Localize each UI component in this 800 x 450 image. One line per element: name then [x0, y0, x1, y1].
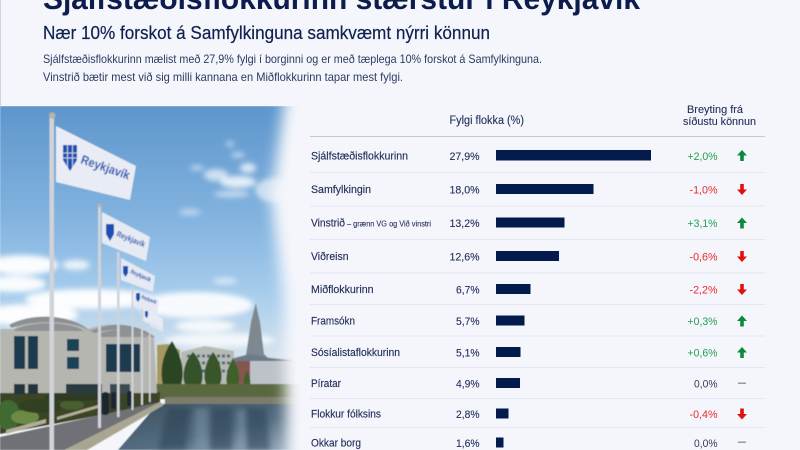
row: Framsókn: +0,3% — [688, 316, 718, 328]
sky — [0, 106, 294, 384]
row: Sósíalistaflokkurinn: 5,1% — [456, 348, 480, 360]
row: Framsókn — [311, 316, 747, 328]
row: Sósíalistaflokkurinn: Sósíalistaflokkurinn — [311, 347, 400, 359]
left page edge — [0, 0, 1, 106]
flag 1: Reykjavík — [79, 153, 132, 182]
ground, quay wall and garden — [0, 392, 164, 450]
row: Okkar borg: Okkar borg — [311, 438, 361, 450]
photo: Reykjavík flags by the pond — [0, 106, 297, 450]
water — [118, 404, 320, 450]
flag 5 — [142, 310, 164, 328]
row: Sósíalistaflokkurinn: +0,6% — [688, 348, 718, 360]
row: Flokkur fólksins — [311, 408, 747, 421]
row: Vinstrið: Vinstrið — [311, 218, 345, 230]
people on the promenade — [102, 391, 132, 415]
row: Píratar: 0,0% — [694, 378, 718, 390]
row: Framsókn: 5,7% — [456, 316, 480, 328]
flag poles — [49, 112, 151, 450]
row: Miðflokkurinn: Miðflokkurinn — [311, 284, 374, 296]
intro text — [43, 52, 542, 84]
row: Framsókn: Framsókn — [311, 316, 355, 328]
row: Vinstrið: 13,2% — [450, 218, 480, 230]
table header: support: Fylgi flokka (%) — [450, 115, 524, 127]
flag 6 — [150, 324, 164, 332]
clouds — [0, 141, 295, 347]
row: Okkar borg: 1,6% — [456, 438, 480, 450]
row: Flokkur fólksins: Flokkur fólksins — [311, 408, 381, 420]
intro text: Vinstrið bætir mest við sig milli kannana en Miðflokkurinn tapar mest fylgi. — [43, 70, 403, 84]
row: Sjálfstæðisflokkurinn: Sjálfstæðisflokkurinn — [311, 150, 408, 162]
table header: change — [683, 104, 756, 128]
row: Sjálfstæðisflokkurinn: +2,0% — [688, 151, 718, 163]
row: Okkar borg — [311, 438, 746, 450]
table header: change: síðustu könnun — [683, 116, 756, 128]
row: Samfylkingin: -1,0% — [690, 184, 718, 196]
subtitle: Nær 10% forskot á Samfylkinguna samkvæmt nýrri könnun — [43, 23, 490, 43]
row: Miðflokkurinn — [311, 284, 747, 296]
row: Píratar — [311, 378, 746, 390]
far shore — [156, 383, 297, 405]
building — [0, 317, 157, 394]
photo scene — [0, 106, 320, 450]
row: Viðreisn — [311, 251, 747, 264]
flag 2 — [102, 212, 150, 261]
table header: change: Breyting frá — [687, 104, 744, 116]
intro text: Sjálfstæðisflokkurinn mælist með 27,9% fylgi í borginni og er með tæplega 10% forskot á Samfylkinguna. — [43, 52, 542, 66]
row: Flokkur fólksins: -0,4% — [690, 409, 718, 421]
row: Miðflokkurinn: -2,2% — [690, 284, 718, 296]
row: Viðreisn: 12,6% — [450, 252, 480, 264]
flag 3 — [121, 258, 155, 292]
row: Okkar borg: 0,0% — [694, 438, 718, 450]
row: Flokkur fólksins: 2,8% — [456, 409, 480, 421]
row: Sjálfstæðisflokkurinn: 27,9% — [450, 151, 480, 163]
flag 1 — [56, 126, 136, 200]
row: Samfylkingin: Samfylkingin — [311, 184, 371, 196]
photo fade into page — [262, 106, 320, 450]
row: Miðflokkurinn: 6,7% — [456, 284, 480, 296]
row: Píratar: Píratar — [311, 378, 341, 390]
row: Samfylkingin — [311, 184, 747, 196]
row: Samfylkingin: 18,0% — [450, 184, 480, 196]
flag 4: Reykjavík — [140, 294, 157, 306]
row: Sósíalistaflokkurinn — [311, 347, 747, 360]
row: Píratar: 4,9% — [456, 378, 480, 390]
row: Sjálfstæðisflokkurinn — [311, 150, 747, 163]
row: Viðreisn: Viðreisn — [311, 251, 348, 263]
city skyline — [157, 303, 295, 390]
row: Viðreisn: -0,6% — [690, 252, 718, 264]
flag 3: Reykjavík — [129, 269, 152, 284]
flag 2: Reykjavík — [115, 230, 147, 249]
flag 4 — [134, 290, 159, 314]
row: Vinstrið — [311, 218, 747, 230]
row: Vinstrið: +3,1% — [688, 218, 718, 230]
row: Vinstrið: – grænn VG og Við vinstri — [347, 220, 431, 228]
